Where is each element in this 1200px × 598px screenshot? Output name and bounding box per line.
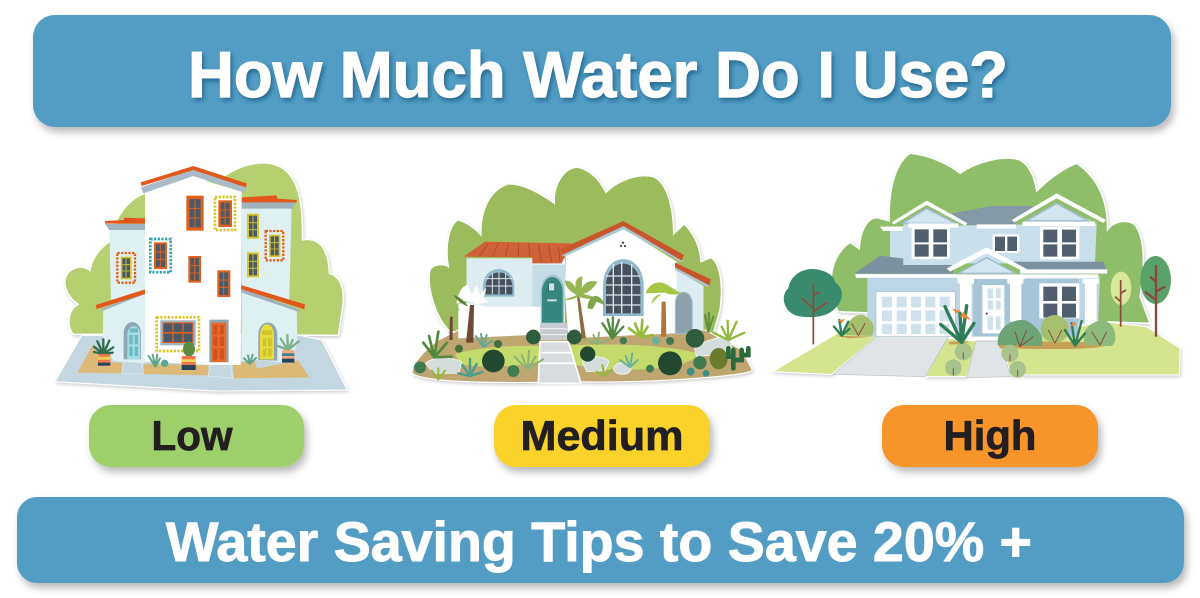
illustration: low water use townhouse bbox=[55, 163, 347, 391]
arched window, large bbox=[603, 259, 644, 316]
lawn patches bbox=[455, 344, 698, 370]
front lawn left bbox=[773, 332, 877, 374]
green trees behind house bbox=[831, 153, 1150, 323]
planted ground bbox=[412, 330, 752, 382]
footer text: Water Saving Tips to Save 20% + bbox=[166, 510, 1032, 573]
right lower window bbox=[1039, 283, 1079, 318]
green bushes behind townhouse bbox=[65, 163, 343, 335]
birds of paradise bbox=[834, 306, 1085, 346]
porch gable bbox=[947, 247, 1098, 337]
front path bbox=[967, 341, 1011, 378]
spiky agaves bbox=[423, 332, 452, 357]
foundation shrubs bbox=[846, 315, 1115, 378]
palm trees bbox=[438, 277, 681, 343]
pill: medium: Medium bbox=[520, 412, 684, 459]
illustration: medium water use xeriscape bungalow bbox=[412, 167, 752, 383]
boulders bbox=[426, 337, 732, 374]
left wing wall bbox=[458, 258, 565, 338]
specimen trees bbox=[784, 256, 1171, 344]
pill: low bbox=[89, 405, 304, 467]
pill: medium bbox=[494, 405, 710, 467]
tile roof, left bbox=[463, 242, 572, 263]
pill: high: High bbox=[944, 412, 1036, 459]
front lawn right bbox=[1003, 322, 1180, 375]
footer banner bbox=[17, 497, 1184, 583]
potted plants bbox=[94, 335, 299, 370]
gable wall bbox=[565, 228, 703, 338]
center window and gable bbox=[977, 224, 1019, 253]
bed mulch bbox=[835, 336, 1112, 349]
gable roof trim bbox=[562, 226, 683, 262]
sand planting beds bbox=[77, 345, 309, 378]
garage door bbox=[876, 292, 955, 337]
front walkway bbox=[538, 342, 581, 383]
path slabs bbox=[122, 359, 233, 378]
windows, tower bbox=[150, 196, 235, 297]
illustration: high water use two-storey house bbox=[773, 153, 1180, 378]
pill: low: Low bbox=[152, 412, 233, 459]
front door bbox=[982, 285, 1004, 333]
title text: How Much Water Do I Use? bbox=[188, 38, 1008, 111]
right gable bbox=[1012, 193, 1106, 262]
left gable bbox=[880, 201, 968, 265]
side gate bbox=[675, 292, 692, 334]
green bushes behind bungalow bbox=[429, 167, 721, 333]
main walls bbox=[867, 277, 1100, 337]
pavement bbox=[55, 335, 347, 391]
lower roofs bbox=[855, 256, 957, 274]
vent dots bbox=[620, 241, 626, 247]
central tower bbox=[145, 177, 242, 365]
upper hip roof bbox=[952, 206, 1033, 225]
succulents and shrubs bbox=[423, 313, 744, 379]
porch columns bbox=[958, 279, 1099, 338]
windows, wings bbox=[117, 214, 283, 283]
title banner bbox=[33, 15, 1171, 127]
driveway bbox=[833, 337, 948, 377]
ground floor window bbox=[157, 317, 199, 351]
front door and steps bbox=[540, 275, 567, 340]
pill: high bbox=[882, 405, 1098, 467]
doors bbox=[124, 320, 277, 362]
left wing bbox=[109, 230, 145, 302]
arched window, small bbox=[483, 269, 514, 297]
round shrubs and cactus bbox=[414, 329, 748, 377]
lower left wing bbox=[103, 293, 145, 363]
lower right wing bbox=[242, 292, 297, 363]
right wing bbox=[242, 207, 292, 300]
